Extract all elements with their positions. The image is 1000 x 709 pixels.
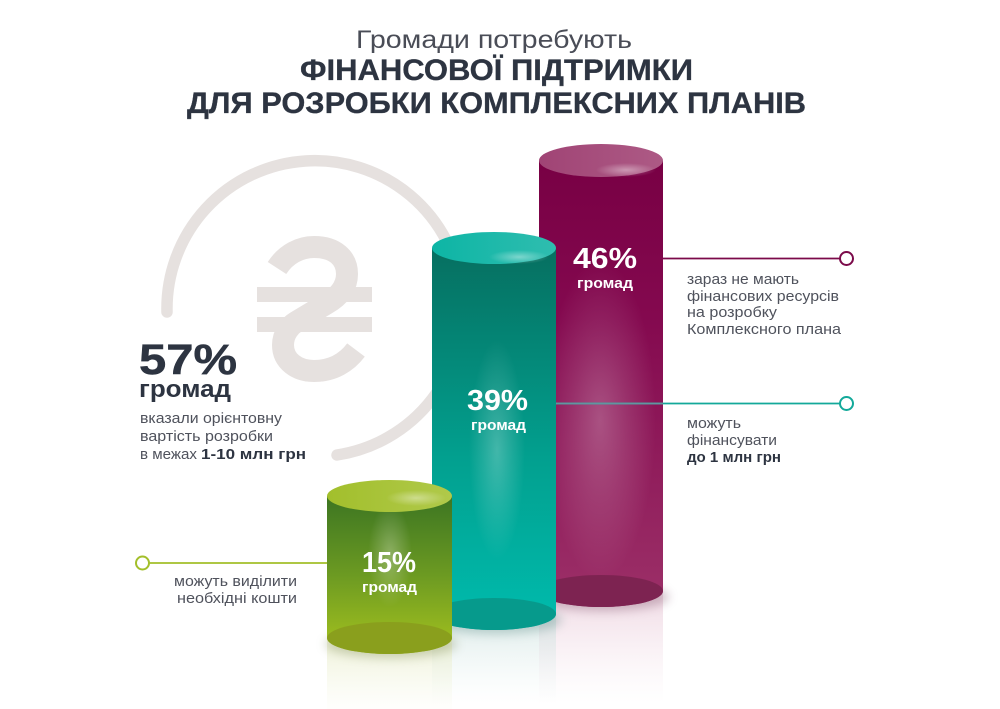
cylinder: 39% teal <box>430 232 562 634</box>
text: can allocate funds: можуть виділити <box>174 573 297 590</box>
text: can finance up to 1 mln: можуть <box>687 415 741 432</box>
text: no financial resources <box>687 271 842 338</box>
label: 46% громад: громад <box>577 276 633 292</box>
title: ФІНАНСОВОЇ ПІДТРИМКИ <box>300 54 693 87</box>
reflections under cylinders <box>327 591 663 709</box>
callout: 57% громад: 57% <box>139 336 237 384</box>
label: 39% громад: 39% <box>467 385 528 417</box>
text: can finance up to 1 mln: фінансувати <box>687 432 777 449</box>
label: 46% громад: 46% <box>573 243 637 275</box>
cylinder: 46% purple <box>537 144 669 611</box>
text: can allocate funds: необхідні кошти <box>177 590 297 607</box>
connector: purple <box>663 252 853 265</box>
text: no financial resources: зараз не мають <box>687 271 799 288</box>
callout: 57% громад <box>139 336 306 463</box>
connector: teal <box>556 397 853 410</box>
title: Громади потребують <box>356 26 632 54</box>
connector: green <box>136 556 327 570</box>
icon: hryvnia sign in circle <box>167 161 463 455</box>
label: 15% громад <box>362 547 417 596</box>
text: no financial resources: на розробку <box>687 304 778 321</box>
text: can allocate funds <box>174 573 297 607</box>
callout: 57% громад: вказали орієнтовну <box>140 410 283 427</box>
title: ДЛЯ РОЗРОБКИ КОМПЛЕКСНИХ ПЛАНІВ <box>187 87 806 120</box>
title <box>187 26 806 120</box>
text: can finance up to 1 mln: до 1 млн грн <box>687 449 781 466</box>
callout: 57% громад: 1-10 млн грн <box>201 446 306 463</box>
text: no financial resources: фінансових ресурсів <box>687 288 839 305</box>
label: 15% громад: 15% <box>362 547 416 579</box>
callout: 57% громад: вартість розробки <box>140 428 273 445</box>
callout: 57% громад: громад <box>139 376 231 403</box>
cylinder: 15% green <box>325 480 457 658</box>
text: no financial resources: Комплексного плана <box>687 321 842 338</box>
text: can finance up to 1 mln <box>687 415 781 466</box>
label: 39% громад <box>467 385 528 434</box>
label: 46% громад <box>573 243 637 292</box>
label: 39% громад: громад <box>471 418 526 434</box>
label: 15% громад: громад <box>362 580 417 596</box>
callout: 57% громад: в межах <box>140 446 198 463</box>
